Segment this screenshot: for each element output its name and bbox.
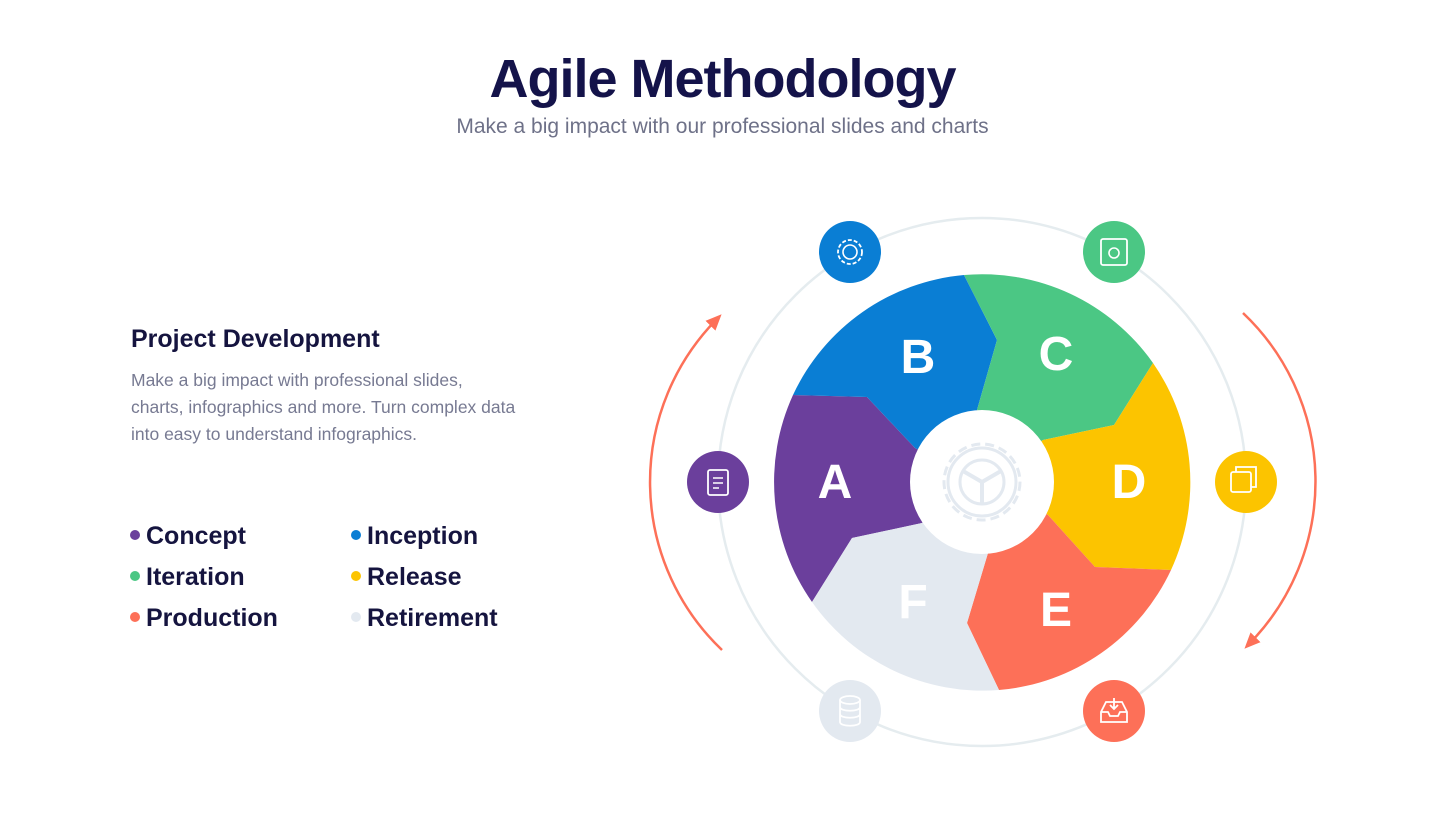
segment E [967,482,1171,690]
icon: A clipboard [687,451,749,513]
segment C [964,274,1153,482]
letters [818,328,1146,637]
letters: D [1112,456,1146,509]
title: Agile Methodology [490,49,955,109]
segment B [793,275,997,482]
outer ring [718,218,1246,746]
legend: Concept [146,522,246,550]
heading: project development: Project Development [131,325,380,353]
legend: Iteration [146,563,245,591]
segment F [812,482,999,691]
legend: Production [146,604,278,632]
legend: Retirement [367,604,498,632]
center circle with gear [910,410,1054,554]
letters: A [818,456,852,509]
arrow: right [1243,313,1315,643]
icon: B gear [819,221,881,283]
legend [130,522,498,632]
segment A [774,395,982,602]
legend: Inception [367,522,478,550]
arrow: left [650,320,722,650]
icon: C hard drive [1083,221,1145,283]
icon: D windows [1215,451,1277,513]
icon: E inbox [1083,680,1145,742]
letters: C [1039,328,1073,381]
icon: F database [819,680,881,742]
subtitle: Make a big impact with our professional slides and charts [456,115,989,138]
segment D [982,363,1190,570]
letters: B [901,331,935,384]
text block: description: Make a big impact with professional slides, charts, infographics and more. Turn complex data into easy to understand infographics. [131,370,515,444]
letters: F [898,576,928,629]
legend: Release [367,563,462,591]
letters: E [1040,584,1072,637]
